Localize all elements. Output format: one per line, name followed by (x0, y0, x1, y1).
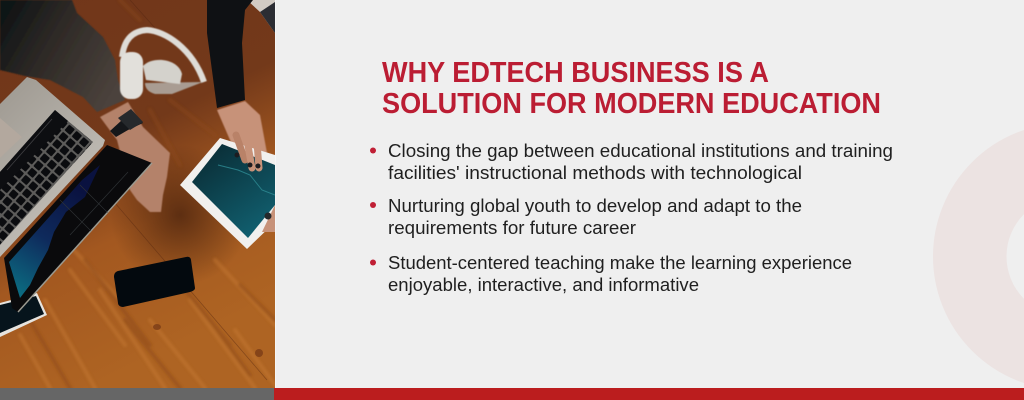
bullet 3: enjoyable, interactive, and informative (388, 275, 699, 295)
bullet 1 (370, 141, 893, 183)
top right corner objects (250, 0, 275, 33)
sleeve: right arm (207, 0, 253, 108)
decorative ring (970, 160, 1024, 353)
footer bar: grey (0, 388, 274, 400)
smart watch (110, 109, 143, 137)
small dark tablet corner (0, 293, 47, 337)
tablet on the right (180, 130, 275, 249)
right hand (216, 100, 268, 152)
headphones (120, 30, 204, 99)
title (382, 57, 881, 120)
footer bar: red (274, 388, 1024, 400)
title: WHY EDTECH BUSINESS IS A (382, 57, 769, 89)
bullet 2: Nurturing global youth to develop and adapt to the (388, 196, 802, 216)
bullet 2 (370, 196, 802, 238)
bullet 1: Closing the gap between educational institutions and training (388, 141, 893, 161)
sleeve: left arm (0, 0, 125, 112)
bullet 3: Student-centered teaching make the learning experience (388, 253, 852, 273)
smartphone (114, 257, 195, 307)
black tablet with chart (4, 145, 152, 312)
title: SOLUTION FOR MODERN EDUCATION (382, 88, 881, 120)
thin light strip next to photo (275, 0, 276, 388)
bullet list (370, 141, 893, 295)
laptop (0, 77, 105, 257)
forearm and left hand (100, 102, 170, 212)
bullet 1: facilities' instructional methods with technological (388, 163, 802, 183)
bullet 3 (370, 253, 852, 295)
bullet 2: requirements for future career (388, 218, 636, 238)
wooden desk (0, 0, 275, 388)
photo: desk with laptop, tablets, headphones and phone (0, 0, 275, 388)
